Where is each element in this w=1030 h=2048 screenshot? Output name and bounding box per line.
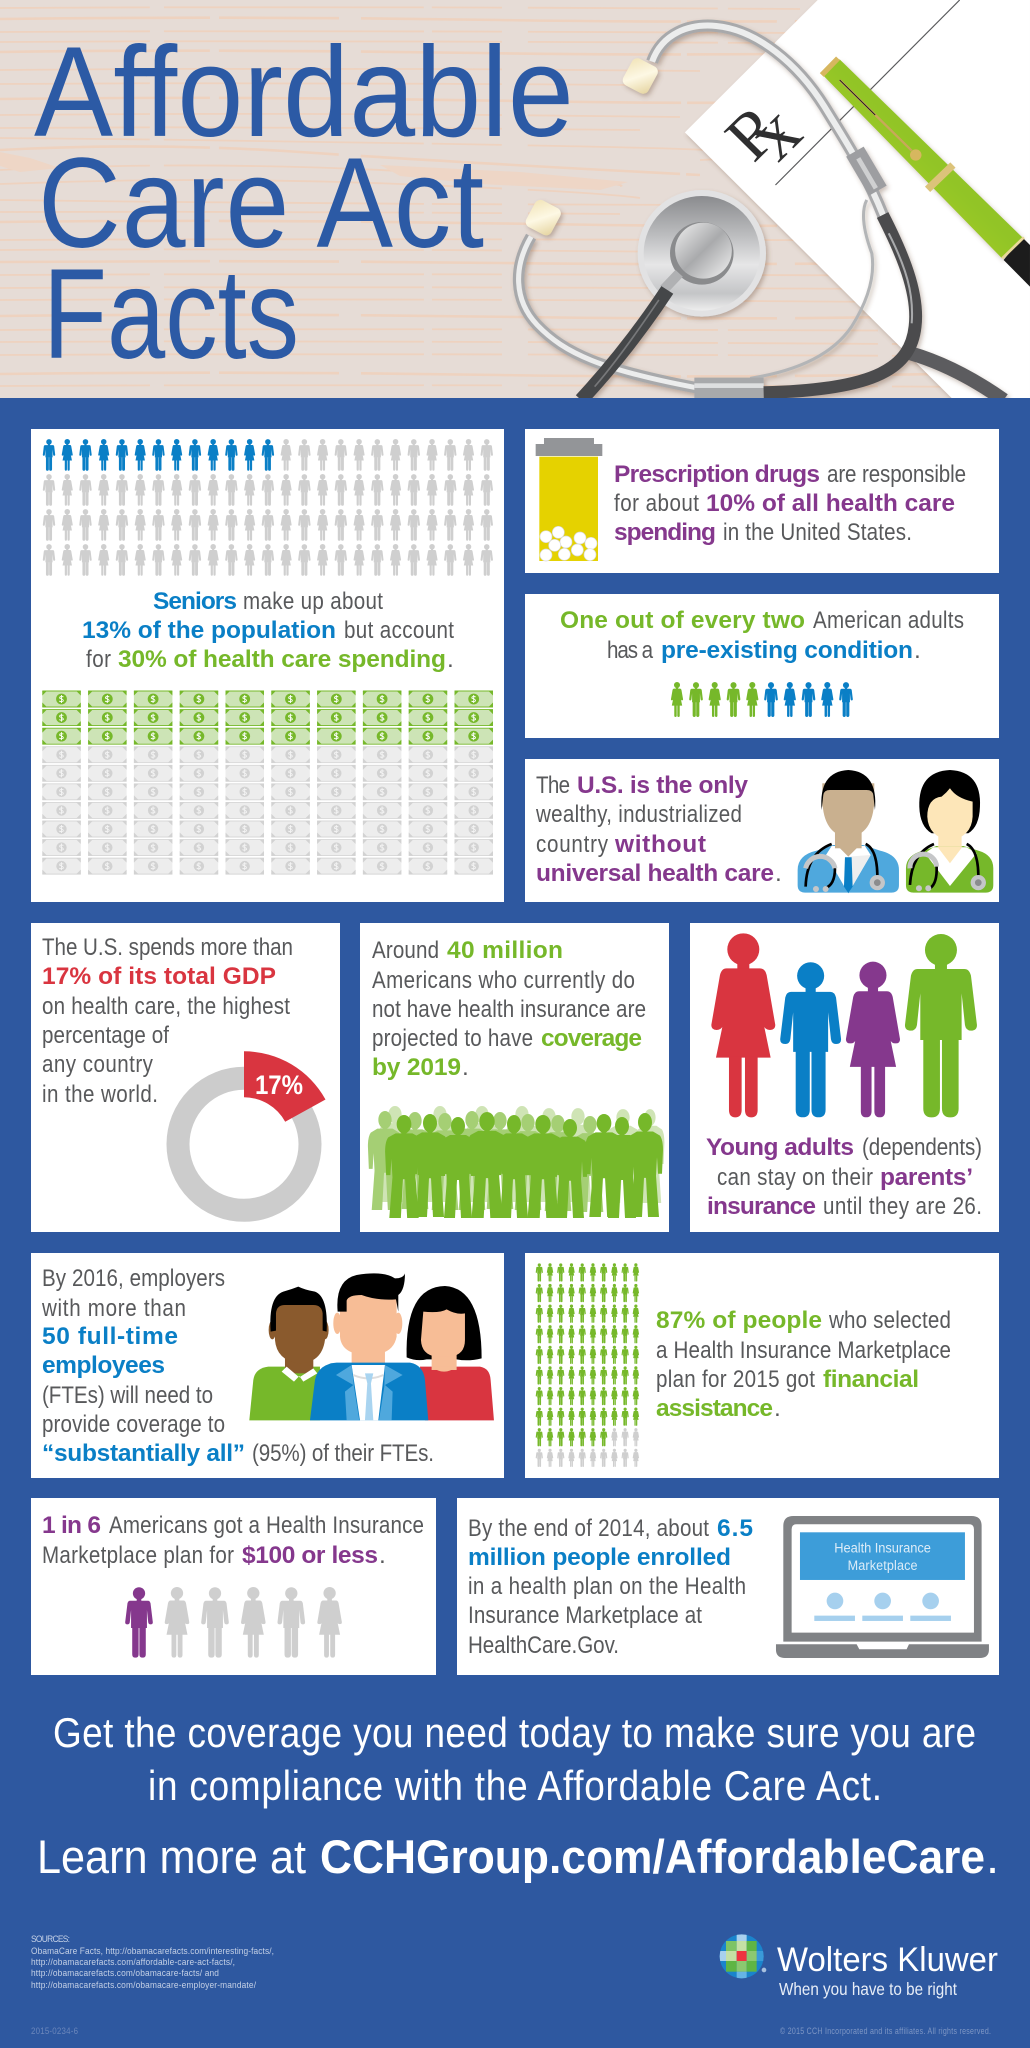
text: 1 in 6: 1 in 6	[42, 1512, 101, 1539]
people chart: 13 of 100 seniors	[43, 439, 493, 576]
text: 1 in 6: Americans got a Health Insurance	[109, 1511, 424, 1538]
icon: family of four	[711, 933, 977, 1117]
text: 40 million: coverage	[541, 1025, 642, 1052]
text: employers: (FTEs) will need to	[42, 1381, 213, 1408]
text: young adults	[706, 1133, 982, 1220]
icon: laptop: Health Insurance	[834, 1540, 931, 1555]
icon: laptop: Marketplace	[848, 1557, 918, 1573]
panel: young adults	[690, 923, 999, 1232]
text: employers: “substantially all”	[42, 1440, 245, 1467]
panel: GDP	[31, 923, 340, 1232]
call to action: in compliance with the Affordable Care Act.	[148, 1763, 882, 1810]
text: universal health care: .	[775, 860, 782, 887]
crowd silhouette	[368, 1106, 664, 1218]
text: seniors: make up about	[243, 587, 384, 614]
text: seniors: Seniors	[153, 588, 237, 615]
sources	[31, 1934, 274, 1990]
text: seniors	[82, 587, 455, 673]
text: young adults: (dependents)	[862, 1133, 982, 1160]
text: universal health care: country	[536, 830, 609, 857]
text: 40 million: Around	[372, 936, 439, 963]
call to action	[37, 1710, 999, 1883]
text: employers: provide coverage to	[42, 1410, 225, 1437]
text: financial assistance: .	[774, 1395, 781, 1422]
text: universal health care: universal health care	[536, 860, 774, 887]
sources: http://obamacarefacts.com/affordable-care-act-facts/,	[31, 1957, 235, 1967]
title	[34, 21, 574, 385]
call to action: Get the coverage you need today to make sure you are	[53, 1710, 976, 1757]
panel: universal health care	[525, 759, 999, 902]
text: enrolled: 6.5	[717, 1515, 753, 1542]
panel: employers	[31, 1253, 504, 1478]
panel: 40 million	[360, 923, 669, 1232]
icon: pill bottle	[536, 438, 602, 561]
text: financial assistance	[656, 1306, 951, 1422]
text: GDP	[42, 933, 293, 1107]
text: prescription drugs: spending	[614, 519, 716, 546]
text: pre-existing condition: .	[914, 637, 921, 664]
logo: Wolters Kluwer: When you have to be right	[779, 1980, 957, 1999]
text: seniors: but account	[344, 616, 455, 643]
Rx symbol	[724, 112, 804, 163]
text: universal health care: U.S. is the only	[577, 772, 748, 799]
call to action: CCHGroup.com/AffordableCare	[320, 1831, 985, 1883]
text: enrolled	[468, 1514, 753, 1658]
text: GDP: in the world.	[42, 1080, 158, 1107]
donut chart: 17%: 17%	[255, 1071, 303, 1100]
panel: financial assistance	[525, 1253, 999, 1478]
call to action: .	[986, 1830, 999, 1883]
icon: male doctor	[798, 770, 899, 893]
panel: pre-existing condition	[525, 594, 999, 738]
text: enrolled: HealthCare.Gov.	[468, 1631, 619, 1658]
money chart: 30 of 100 bills	[42, 691, 493, 874]
Rx symbol: x	[731, 90, 817, 175]
text: young adults: insurance	[707, 1193, 816, 1220]
text: seniors: 30% of health care spending	[118, 646, 446, 673]
text: young adults: Young adults	[706, 1134, 854, 1161]
text: employers	[41, 1264, 434, 1467]
text: 1 in 6: .	[379, 1542, 386, 1569]
text: prescription drugs: are responsible	[827, 460, 966, 487]
logo: Wolters Kluwer: Wolters Kluwer	[777, 1942, 998, 1979]
title: Affordable	[34, 21, 574, 164]
text: pre-existing condition	[560, 606, 964, 664]
text: young adults: can stay on their	[717, 1163, 873, 1190]
text: 40 million: .	[462, 1054, 469, 1081]
panel: 6.5 million enrolled	[457, 1498, 999, 1675]
text: universal health care: wealthy, industrialized	[535, 800, 742, 827]
icon: female doctor	[906, 770, 993, 893]
Rx symbol: R	[711, 90, 796, 175]
icon: logo mosaic	[720, 1934, 766, 1978]
text: prescription drugs: Prescription drugs	[614, 461, 820, 488]
copyright: © 2015 CCH Incorporated and its affiliates. All rights reserved.	[780, 2026, 991, 2036]
text: 1 in 6: Marketplace plan for	[42, 1541, 234, 1568]
text: 40 million: Americans who currently do	[372, 966, 635, 993]
text: 1 in 6	[42, 1511, 424, 1569]
text: employers: 50 full-time	[42, 1323, 178, 1350]
panel: prescription drugs	[525, 429, 999, 573]
text: 40 million	[372, 936, 646, 1081]
header: wood desk with stethoscope	[0, 0, 1030, 400]
text: seniors: 13% of the population	[82, 617, 336, 644]
text: employers: with more than	[41, 1294, 186, 1321]
text: enrolled: million people enrolled	[468, 1544, 731, 1571]
sources: SOURCES:	[31, 1934, 70, 1944]
text: pre-existing condition: pre-existing condition	[661, 637, 913, 664]
sources: http://obamacarefacts.com/obamacare-facts/ and	[31, 1968, 219, 1978]
text: 1 in 6: $100 or less	[242, 1542, 378, 1569]
pen	[822, 58, 1030, 287]
text: employers: employees	[42, 1352, 165, 1379]
text: young adults: parents’	[880, 1164, 973, 1191]
text: 40 million: 40 million	[447, 937, 563, 964]
icon: ear tips	[524, 56, 660, 237]
prescription paper	[685, 0, 1030, 398]
text: prescription drugs: for about	[614, 489, 700, 516]
people: 1 of 6	[125, 1587, 342, 1658]
text: pre-existing condition: American adults	[813, 606, 964, 633]
panel: seniors	[31, 429, 504, 902]
text: universal health care: The	[536, 771, 570, 798]
icon: laptop	[776, 1516, 989, 1658]
text: 40 million: not have health insurance are	[372, 995, 646, 1022]
text: prescription drugs: 10% of all health care	[706, 490, 955, 517]
text: enrolled: By the end of 2014, about	[468, 1514, 710, 1541]
text: enrolled: in a health plan on the Health	[468, 1572, 746, 1599]
text: pre-existing condition: One out of every two	[560, 607, 805, 634]
text: GDP: percentage of	[42, 1021, 170, 1048]
text: enrolled: Insurance Marketplace at	[468, 1601, 703, 1628]
text: employers: (95%) of their FTEs.	[252, 1439, 434, 1466]
text: prescription drugs	[614, 460, 966, 546]
text: GDP: any country	[42, 1050, 154, 1077]
sources: http://obamacarefacts.com/obamacare-employer-mandate/	[31, 1980, 256, 1990]
logo: Wolters Kluwer	[717, 1932, 998, 1999]
text: seniors: .	[447, 646, 454, 673]
text: financial assistance: who selected	[828, 1306, 951, 1333]
text: young adults: until they are 26.	[823, 1192, 982, 1219]
panel: 1 in 6	[31, 1498, 436, 1675]
text: GDP: 17% of its total GDP	[42, 963, 276, 990]
text: financial assistance: a Health Insurance Marketplace	[656, 1336, 951, 1363]
text: 40 million: by 2019	[372, 1054, 461, 1081]
text: universal health care	[535, 771, 782, 887]
text: 40 million: projected to have	[372, 1024, 533, 1051]
people chart: 87 of 100	[536, 1263, 639, 1467]
text: GDP: The U.S. spends more than	[42, 933, 293, 960]
job code: 2015-0234-6	[31, 2026, 78, 2036]
sources: ObamaCare Facts, http://obamacarefacts.com/interesting-facts/,	[31, 1946, 274, 1956]
text: pre-existing condition: has a	[607, 636, 653, 663]
text: financial assistance: 87% of people	[656, 1307, 822, 1334]
title: Care Act	[38, 131, 484, 274]
text: GDP: on health care, the highest	[42, 992, 291, 1019]
call to action: Learn more at	[37, 1830, 306, 1883]
text: employers: By 2016, employers	[42, 1264, 225, 1291]
text: financial assistance: assistance	[656, 1395, 773, 1422]
stethoscope	[519, 26, 1004, 400]
text: seniors: for	[86, 645, 111, 672]
people: one out of two	[671, 682, 853, 717]
title: Facts	[43, 242, 299, 385]
text: financial assistance: plan for 2015 got	[656, 1365, 816, 1392]
text: universal health care: without	[614, 831, 706, 858]
icon: three employees	[249, 1273, 494, 1420]
donut chart: 17%	[178, 1051, 326, 1210]
text: financial assistance: financial	[823, 1366, 919, 1393]
text: prescription drugs: in the United States.	[723, 518, 912, 545]
